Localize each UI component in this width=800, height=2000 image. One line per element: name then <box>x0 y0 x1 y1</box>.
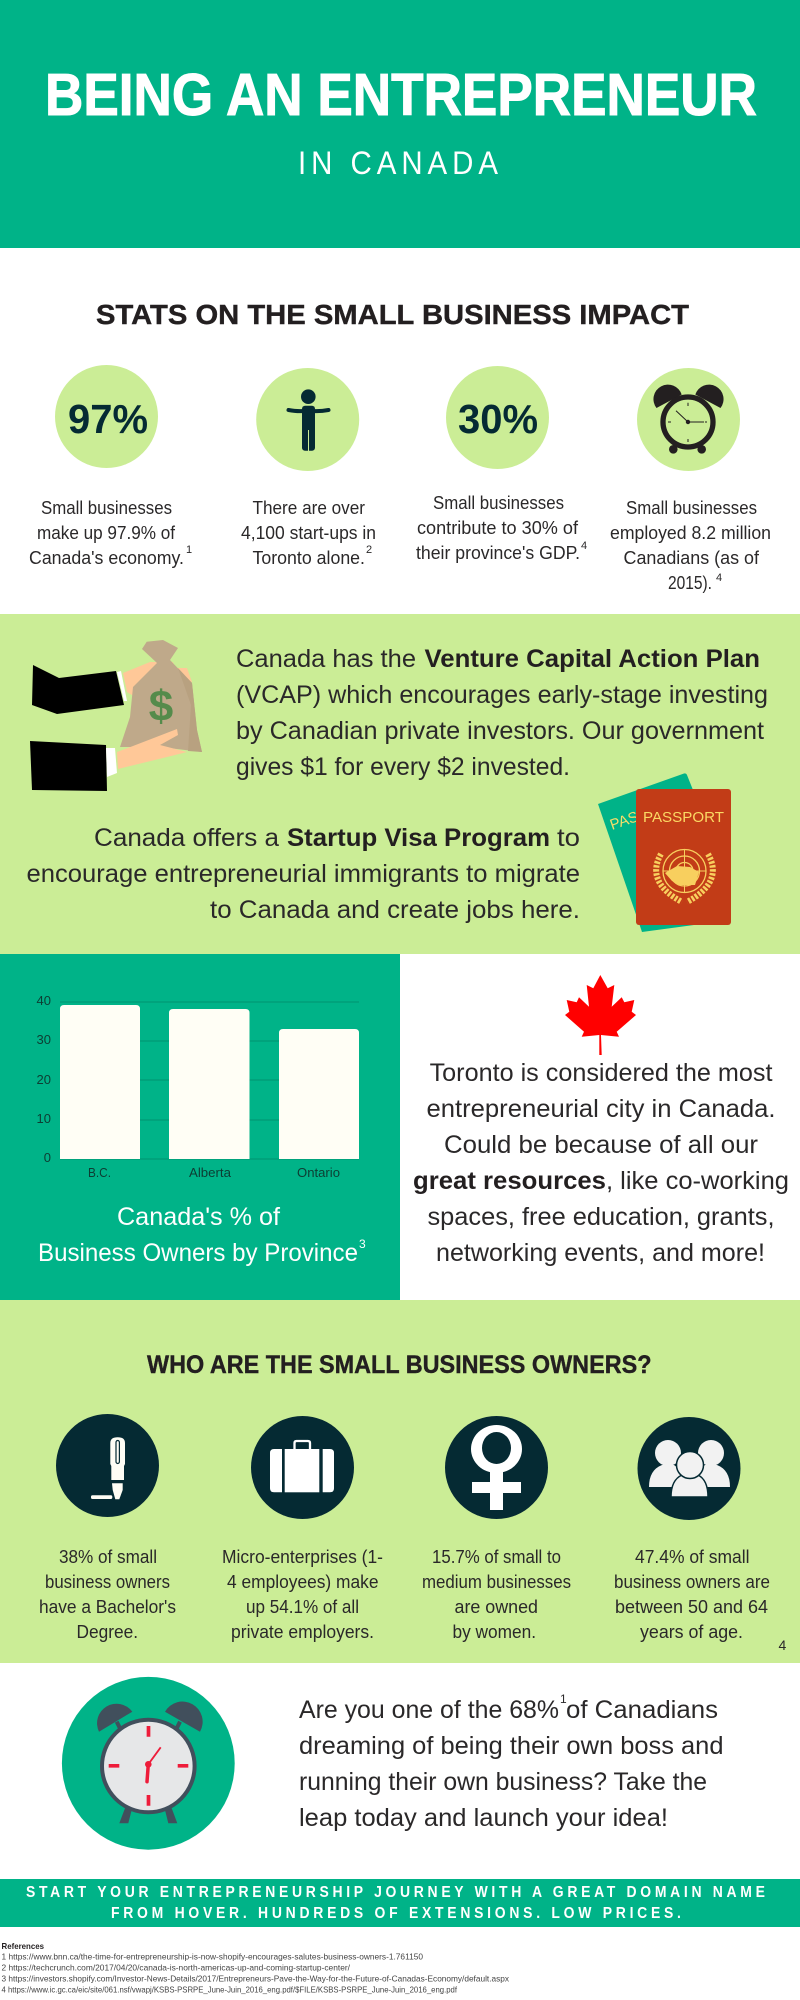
stat: micro-enterprises: 4 employees) make <box>227 1572 378 1592</box>
stat: 30 percent <box>416 366 587 563</box>
icon: passports <box>598 773 731 932</box>
panel: call to action <box>62 1677 723 1850</box>
banner: Hover call to action: START YOUR ENTREPRENEURSHIP JOURNEY WITH A GREAT DOMAIN NAME <box>26 1884 765 1901</box>
text: take the leap: leap today and launch your idea! <box>299 1804 668 1832</box>
heading: owners: WHO ARE THE SMALL BUSINESS OWNERS? <box>147 1351 652 1379</box>
text: Toronto: great resources <box>413 1167 606 1195</box>
stat: 97 percent: Small businesses <box>41 498 172 518</box>
references: References <box>2 1941 44 1951</box>
stat: start-ups in Toronto: Toronto alone. <box>252 548 365 568</box>
stat: micro-enterprises <box>222 1416 383 1642</box>
stat: employment: Canadians (as of <box>624 548 760 568</box>
bar chart: 0 <box>44 1150 51 1165</box>
stat: women <box>422 1416 571 1642</box>
stat: age: years of age. <box>640 1622 743 1642</box>
stat: women: by women. <box>452 1622 536 1642</box>
stat: 30 percent: their province's GDP. <box>416 543 580 563</box>
stat: 30 percent: Small businesses <box>433 493 564 513</box>
text: Startup Visa Program <box>26 824 580 924</box>
text: Toronto: , like co-working <box>606 1167 789 1195</box>
stat: 30 percent: 4 <box>581 540 587 552</box>
icon: female symbol <box>471 1425 522 1510</box>
stat: education: 38% of small <box>59 1547 157 1567</box>
icon: alarm clock <box>653 385 724 454</box>
text: take the leap: 1 <box>560 1692 567 1706</box>
stat: 97 percent <box>29 365 192 568</box>
icon: briefcase <box>270 1441 334 1492</box>
bar chart: 20 <box>37 1072 51 1087</box>
text: Venture Capital Action Plan: gives $1 for every $2 invested. <box>236 753 570 781</box>
stat: micro-enterprises: private employers. <box>231 1622 374 1642</box>
chart caption <box>38 1203 366 1267</box>
text: Startup Visa Program: encourage entrepreneurial immigrants to migrate <box>26 860 580 888</box>
text: Toronto: networking events, and more! <box>436 1239 765 1267</box>
stat: employment: 2015). <box>668 573 712 593</box>
stat: employment: Small businesses <box>626 498 757 518</box>
stat: women: 15.7% of small to <box>432 1547 561 1567</box>
bar chart: Ontario <box>297 1165 340 1180</box>
stat: employment: employed 8.2 million <box>610 523 771 543</box>
stat: start-ups in Toronto: 2 <box>366 544 372 556</box>
stat: employment: 4 <box>716 572 722 584</box>
text: take the leap: running their own business? Take the <box>299 1768 707 1796</box>
stat: women: are owned <box>454 1597 538 1617</box>
icon: emblem <box>656 850 713 902</box>
icon: maple leaf <box>565 975 636 1055</box>
text: Startup Visa Program: Canada offers a <box>94 824 279 852</box>
bar chart: B.C. <box>88 1165 111 1180</box>
stat: start-ups in Toronto: 4,100 start-ups in <box>241 523 376 543</box>
text: take the leap: dreaming of being their own boss and <box>299 1732 724 1760</box>
bar chart: Alberta <box>189 1165 232 1180</box>
stat: 97 percent: Canada's economy. <box>29 548 184 568</box>
chart caption: Canada's % of <box>117 1203 280 1231</box>
stat: age <box>614 1417 770 1642</box>
stat: start-ups in Toronto <box>241 368 376 568</box>
stat: age: between 50 and 64 <box>615 1597 768 1617</box>
text: Toronto: spaces, free education, grants, <box>428 1203 774 1231</box>
text: Venture Capital Action Plan <box>236 645 768 781</box>
references <box>2 1941 510 1995</box>
references: 3 https://investors.shopify.com/Investor-News-Details/2017/Entrepreneurs-Pave-the-Way-for-the-Future-of-Canadas-Economy/default.aspx <box>2 1974 510 1984</box>
panel: business owners chart <box>0 954 400 1300</box>
text: Toronto <box>413 1059 789 1267</box>
icon: clock on green circle <box>62 1677 235 1850</box>
text: Startup Visa Program: to <box>557 824 580 852</box>
text: Venture Capital Action Plan: Canada has the <box>236 645 416 673</box>
text: take the leap <box>299 1692 724 1832</box>
stat: education <box>39 1414 176 1642</box>
stat: age: 47.4% of small <box>635 1547 750 1567</box>
bar chart <box>37 993 359 1180</box>
stat: 97 percent: 97% <box>68 396 148 442</box>
stat: 30 percent: 30% <box>458 396 538 442</box>
bar chart: 10 <box>37 1111 51 1126</box>
references: 2 https://techcrunch.com/2017/04/20/canada-is-north-americas-up-and-coming-startup-center/ <box>2 1963 351 1973</box>
chart caption: 3 <box>359 1237 366 1251</box>
stat: age: business owners are <box>614 1572 770 1592</box>
text: Startup Visa Program: to Canada and create jobs here. <box>210 896 580 924</box>
references: 1 https://www.bnn.ca/the-time-for-entrepreneurship-is-now-shopify-encourages-salutes-business-owners-1.761150 <box>2 1952 423 1962</box>
stat: employment <box>610 368 771 593</box>
stat: education: business owners <box>45 1572 170 1592</box>
text: Toronto: Could be because of all our <box>444 1131 758 1159</box>
panel: Toronto <box>413 975 789 1267</box>
text: Toronto: Toronto is considered the most <box>430 1059 773 1087</box>
text: take the leap: of Canadians <box>566 1696 718 1724</box>
stat: 97 percent: 1 <box>186 544 192 556</box>
icon: hands with money bag: $ <box>149 682 173 731</box>
icon: pen <box>91 1437 125 1499</box>
text: Venture Capital Action Plan: (VCAP) which encourages early-stage investing <box>236 681 768 709</box>
stat: micro-enterprises: Micro-enterprises (1- <box>222 1547 383 1567</box>
text: Toronto: entrepreneurial city in Canada. <box>426 1095 776 1123</box>
stat: education: Degree. <box>76 1622 138 1642</box>
text: Venture Capital Action Plan: by Canadian private investors. Our government <box>236 717 764 745</box>
text: take the leap: Are you one of the 68% <box>299 1696 559 1724</box>
bar chart: 30 <box>37 1032 51 1047</box>
panel: government programs <box>0 614 800 954</box>
references: 4 https://www.ic.gc.ca/eic/site/061.nsf/vwapj/KSBS-PSRPE_June-Juin_2016_eng.pdf/$FILE/KSBS-PSRPE_June-Juin_2016_eng.pdf <box>2 1985 458 1995</box>
subtitle: IN CANADA <box>298 145 498 181</box>
panel: small business stats <box>29 299 771 593</box>
banner: Hover call to action: FROM HOVER. HUNDREDS OF EXTENSIONS. LOW PRICES. <box>111 1905 681 1922</box>
stat: start-ups in Toronto: There are over <box>252 498 365 518</box>
icon: passports: PASSPORT <box>643 809 724 826</box>
text: Venture Capital Action Plan: Venture Capital Action Plan <box>424 645 760 673</box>
bar chart: 40 <box>37 993 51 1008</box>
icon: hands with money bag <box>30 640 202 791</box>
chart caption: Business Owners by Province <box>38 1239 358 1267</box>
icon: person <box>288 389 328 451</box>
stat: micro-enterprises: up 54.1% of all <box>246 1597 359 1617</box>
footnote marker: 4 <box>778 1637 786 1653</box>
banner: Hover call to action <box>0 1879 800 1927</box>
text: Startup Visa Program: Startup Visa Program <box>287 824 550 852</box>
icon: people <box>649 1440 730 1497</box>
panel: who are the owners <box>0 1300 800 1663</box>
icon: passports: PASSPORT <box>608 792 689 834</box>
panel: header <box>0 0 800 248</box>
stat: 97 percent: make up 97.9% of <box>37 523 176 543</box>
heading: stats: STATS ON THE SMALL BUSINESS IMPACT <box>96 299 689 330</box>
stat: 30 percent: contribute to 30% of <box>417 518 579 538</box>
stat: women: medium businesses <box>422 1572 571 1592</box>
stat: education: have a Bachelor's <box>39 1597 176 1617</box>
